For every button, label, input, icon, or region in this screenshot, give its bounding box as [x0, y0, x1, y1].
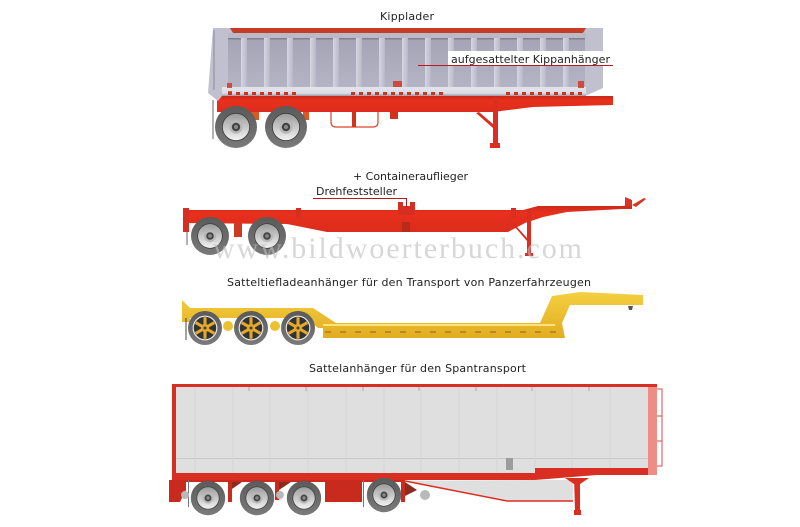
headboard edge: [213, 30, 215, 90]
wheels: [188, 311, 222, 345]
side panels: [228, 38, 585, 88]
deck gussets: [325, 331, 560, 333]
truck: Spantransport: [169, 384, 662, 515]
frame: [183, 205, 632, 232]
central post: [402, 222, 410, 232]
deck rail: [323, 324, 555, 326]
lower chassis: [169, 480, 405, 502]
label: Drehfeststeller: [313, 185, 406, 207]
wheels: [191, 217, 229, 255]
supports: [188, 480, 364, 507]
ladder: [657, 389, 662, 466]
truck: Containerauflieger: [183, 197, 646, 256]
kingpin: [628, 306, 633, 310]
caption: Spantransport: Sattelanhänger für den Spantransport: [309, 362, 527, 375]
truck: Satteltieflader: [182, 292, 643, 345]
belly panel: [405, 480, 573, 501]
marker stripes: [228, 92, 586, 95]
top red band: [230, 28, 586, 33]
label: Drehfeststeller: Drehfeststeller: [316, 185, 397, 198]
frame: [182, 292, 643, 338]
chassis braces: [232, 482, 417, 496]
caption: Kipplader: Kipplader: [380, 10, 434, 23]
rear post and lumps: [183, 202, 516, 232]
caption: Satteltieflader: Satteltiefladeanhänger für den Transport von Panzerfahrzeugen: [227, 276, 591, 289]
rear line: [186, 232, 188, 245]
caption: Containerauflieger: + Containerauflieger: [353, 170, 468, 183]
truck: Kipplader (tipper trailer): [208, 28, 613, 148]
label: aufgesattelter Kippanhänger: aufgesattelter Kippanhänger: [451, 53, 610, 66]
tipper body: [208, 28, 603, 101]
wheels: [215, 106, 257, 148]
landing gear: [476, 98, 500, 148]
spare wheel: [420, 490, 430, 500]
side panel: [176, 387, 648, 473]
gooseneck tip: [625, 197, 646, 207]
marker lights: [227, 81, 584, 95]
axle hangers: [250, 112, 309, 120]
axle hanger: [234, 223, 242, 237]
mudguard line: [212, 100, 214, 139]
landing gear: [565, 478, 589, 515]
watermark: www.bildwoerterbuch.com: [213, 232, 582, 265]
landing gear: [507, 210, 533, 256]
chassis: [217, 96, 613, 112]
outer body: [172, 384, 657, 480]
toolbox frame: [331, 112, 378, 127]
rear line: [185, 318, 187, 340]
right end: [648, 387, 657, 475]
bottom rail: [222, 87, 586, 96]
wheels: [191, 481, 225, 515]
vertical ribs: [241, 38, 569, 90]
brake drums: [223, 321, 233, 331]
